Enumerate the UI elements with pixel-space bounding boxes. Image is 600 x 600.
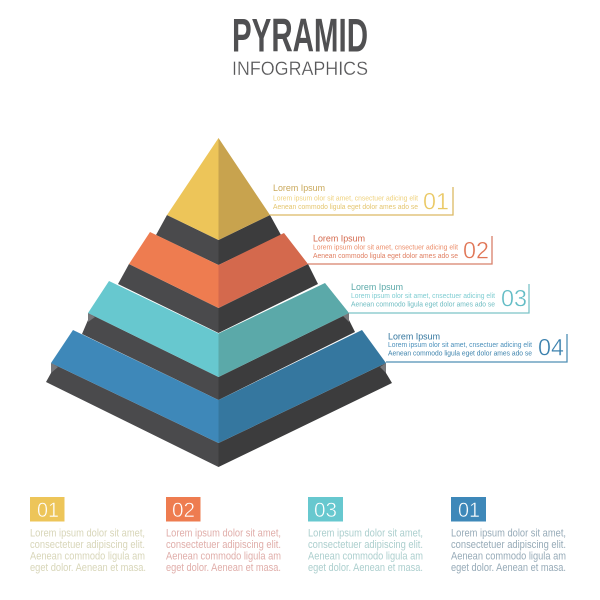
yellow apex tier xyxy=(167,138,270,240)
panel: bottom 02: 02 xyxy=(172,499,195,522)
callout 02: 02 xyxy=(463,238,489,264)
callout 03 xyxy=(349,282,529,313)
callout 02: Aenean commodo ligula eget dolor ames ado se xyxy=(313,253,458,260)
panel: bottom 01: consectetuer adipiscing elit. xyxy=(30,539,145,551)
dark tier 3 xyxy=(82,313,355,400)
orange tier xyxy=(129,232,308,308)
panel: bottom 04 xyxy=(451,497,566,574)
base dark tier xyxy=(46,363,392,467)
panel: bottom 04: Aenean commodo ligula am xyxy=(451,550,566,562)
callout 03: Lorem Ipsum xyxy=(351,282,403,293)
panel: bottom 02 xyxy=(166,497,281,574)
dark tier 2 xyxy=(118,264,318,333)
teal tier xyxy=(88,281,349,377)
callout 04: 04 xyxy=(538,334,564,362)
callout 02: Lorem ipsum olor sit amet, cnsectuer adicing elit xyxy=(313,244,458,252)
callout 01: Aenean commodo ligula eget dolor ames ado se xyxy=(273,204,418,211)
panel: bottom 04: eget dolor. Aenean et masa. xyxy=(451,562,566,574)
panel: bottom 03: Lorem ipsum dolor sit amet, xyxy=(308,528,423,540)
panel: bottom 02: Lorem ipsum dolor sit amet, xyxy=(166,528,281,540)
dark tier 1 xyxy=(156,215,281,265)
panel: bottom 03: Aenean commodo ligula am xyxy=(308,550,423,562)
panel: bottom 03 xyxy=(308,497,423,574)
callout 03: 03 xyxy=(501,286,527,312)
panel: bottom 01: 01 xyxy=(37,499,59,522)
callout 04: Aenean commodo ligula eget dolor ames ado se xyxy=(388,350,532,358)
panel: bottom 01: eget dolor. Aenean et masa. xyxy=(30,562,146,574)
heading: pyramid: PYRAMID xyxy=(232,10,368,62)
pyramid chart xyxy=(46,138,392,467)
panel: bottom 02: eget dolor. Aenean et masa. xyxy=(166,562,281,574)
callout 02: Lorem Ipsum xyxy=(313,234,365,244)
panel: bottom 01: Aenean commodo ligula am xyxy=(30,550,145,562)
callout 01: 01 xyxy=(423,188,449,216)
callout 04: Lorem ipsum olor sit amet, cnsectuer adicing elit xyxy=(388,342,532,349)
callout 03: Lorem ipsum olor sit amet, cnsectuer adicing elit xyxy=(351,293,495,300)
subheading: infographics: INFOGRAPHICS xyxy=(232,58,368,80)
panel: bottom 04: Lorem ipsum dolor sit amet, xyxy=(451,528,566,540)
blue tier xyxy=(51,330,386,443)
callout 01 xyxy=(270,183,453,216)
title xyxy=(232,10,368,80)
panel: bottom 04: 01 xyxy=(458,499,480,522)
callout 03: Aenean commodo ligula eget dolor ames ado se xyxy=(351,302,495,308)
callout 02 xyxy=(308,234,492,264)
panel: bottom 01: Lorem ipsum dolor sit amet, xyxy=(30,528,145,540)
callout 04 xyxy=(386,332,567,362)
callout 01: Lorem ipsum olor sit amet, cnsectuer adicing elit xyxy=(273,196,418,202)
panel: bottom 03: eget dolor. Aenean et masa. xyxy=(308,562,423,574)
panel: bottom 03: 03 xyxy=(314,499,337,522)
callout 01: Lorem Ipsum xyxy=(273,183,325,194)
panel: bottom 02: consectetuer adipiscing elit. xyxy=(166,539,281,551)
panel: bottom 03: consectetuer adipiscing elit. xyxy=(308,539,423,551)
panel: bottom 01 xyxy=(30,497,146,574)
panel: bottom 02: Aenean commodo ligula am xyxy=(166,550,281,562)
callout 04: Lorem Ipsum xyxy=(388,332,440,342)
panel: bottom 04: consectetuer adipiscing elit. xyxy=(451,539,566,551)
